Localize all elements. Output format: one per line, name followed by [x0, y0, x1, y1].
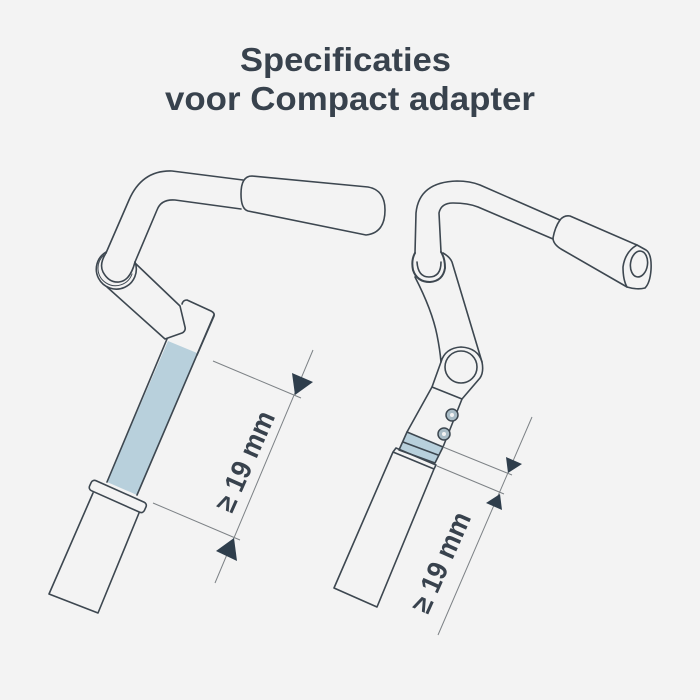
- right dimension: [405, 417, 532, 635]
- right dimension label: ≥ 19 mm: [405, 507, 477, 617]
- left tube edges: [107, 315, 214, 495]
- title: Specificaties: [240, 41, 451, 78]
- right arrowhead top: [506, 457, 522, 473]
- right upper arm: [415, 253, 482, 362]
- right grip hole: [629, 250, 649, 278]
- title: voor Compact adapter: [165, 80, 535, 117]
- left collar: [88, 479, 147, 514]
- left arrowhead top: [292, 373, 313, 395]
- left grip: [241, 176, 385, 235]
- left dimension: [153, 350, 313, 583]
- right diagram: handlebar with compact adapter: [334, 181, 651, 607]
- right arrowhead bottom: [486, 494, 502, 510]
- left blue insertion zone: [107, 341, 197, 495]
- right grip: [553, 216, 651, 289]
- left dimension label: ≥ 19 mm: [209, 406, 281, 516]
- right clamp: [407, 347, 483, 447]
- right handle bar: [415, 181, 560, 253]
- right grip end: [623, 245, 637, 287]
- right screws: [438, 409, 458, 440]
- right lower tube: [334, 448, 436, 607]
- left lower tube: [49, 493, 139, 613]
- left handle bar: [106, 171, 243, 262]
- title: [165, 41, 535, 117]
- right blue bands: [399, 432, 443, 463]
- left diagram: handlebar with adapter: [49, 171, 385, 613]
- right dimension lines: [437, 417, 532, 635]
- left arrowhead bottom: [216, 538, 237, 561]
- left adapter plate: [182, 300, 214, 355]
- left dimension lines: [153, 350, 313, 583]
- right pivot rings: [412, 252, 445, 282]
- left pivot rings: [96, 252, 136, 289]
- left lever arm: [107, 263, 185, 339]
